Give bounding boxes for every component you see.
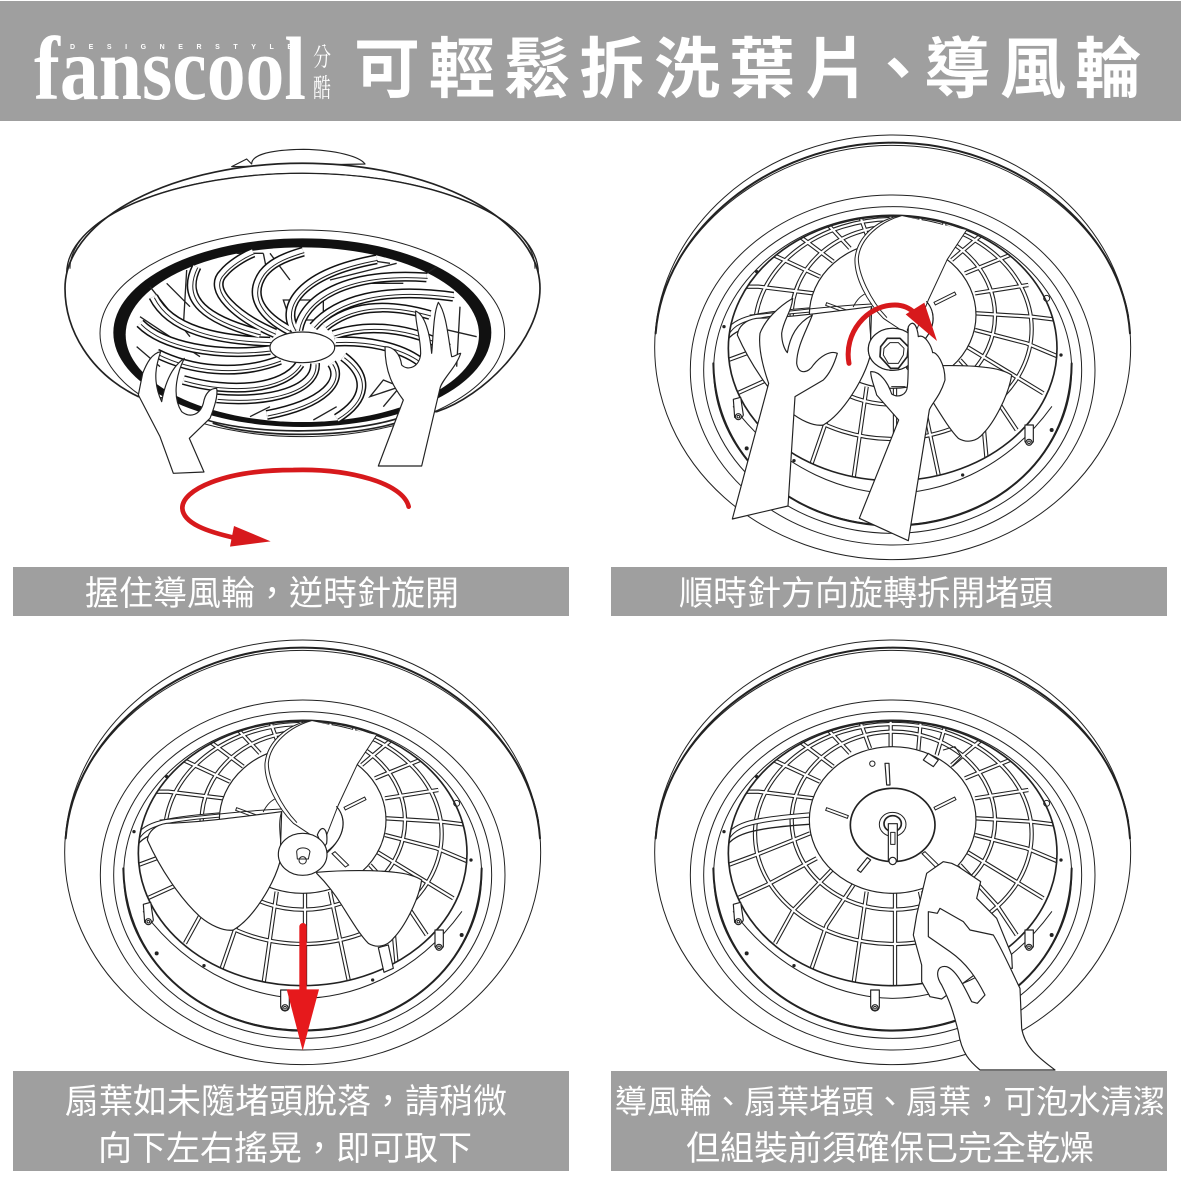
cleaning cloth (913, 862, 1012, 999)
caption: step 2: 順時針方向旋轉拆開堵頭 (679, 575, 1053, 613)
brand logo: fanscool (34, 20, 306, 119)
fan with blades (655, 135, 1131, 560)
caption: step 1 (13, 567, 569, 616)
panel: step 1 grip and rotate air guide (65, 149, 540, 547)
title: 可輕鬆拆洗葉片、導風輪 (354, 32, 1141, 106)
header banner (0, 1, 1181, 121)
caption: step 4 (611, 1071, 1167, 1171)
red down arrow (287, 927, 319, 1051)
ceiling fan (65, 149, 540, 437)
fan blades (140, 252, 453, 418)
panel: step 4 wipe air guide (655, 640, 1131, 1070)
red rotation arrow (848, 303, 937, 363)
centre light (270, 332, 335, 363)
panel: step 3 pull blades down (65, 640, 541, 1065)
left hand (138, 352, 217, 473)
right hand (859, 323, 945, 541)
hand (928, 908, 1055, 1070)
brand logo: 酷 (313, 74, 331, 103)
caption: step 2 (611, 567, 1167, 616)
brand logo: 分 (313, 43, 331, 72)
panel: step 2 unscrew blade cap (655, 135, 1131, 560)
fan with blades (65, 640, 541, 1065)
fan without blades (655, 640, 1131, 1065)
caption: step 1: 握住導風輪，逆時針旋開 (85, 575, 459, 613)
brand logo: DESIGNERSTYLE (70, 44, 292, 51)
caption: step 4: 導風輪、扇葉堵頭、扇葉，可泡水清潔 (615, 1084, 1165, 1120)
caption: step 3 (13, 1071, 569, 1171)
red rotation arrow (182, 470, 409, 547)
black inner ring (113, 238, 491, 427)
right hand (378, 302, 461, 466)
caption: step 3: 向下左右搖晃，即可取下 (98, 1130, 472, 1168)
caption: step 4: 但組裝前須確保已完全乾燥 (686, 1130, 1094, 1168)
caption: step 3: 扇葉如未隨堵頭脫落，請稍微 (65, 1083, 507, 1121)
left hand (732, 298, 837, 519)
